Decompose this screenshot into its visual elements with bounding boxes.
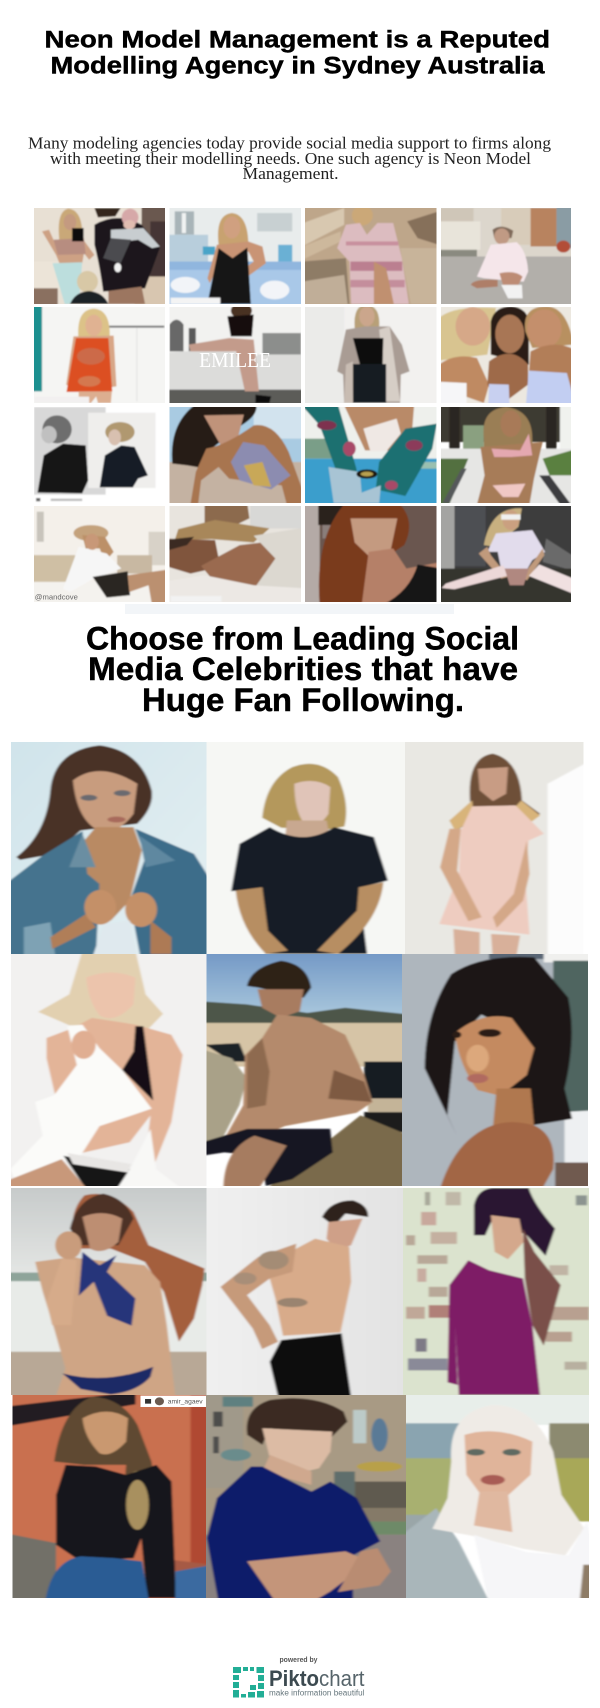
photo: navy polo man <box>206 1395 406 1598</box>
title: Neon Model Management is a Reputed <box>44 26 550 54</box>
photo: white tee sitting on road <box>441 506 571 602</box>
panel: top photo grid <box>23 198 581 614</box>
photo: EMILEE fashion ad <box>170 307 301 403</box>
photo: platinum blonde portrait <box>406 1395 589 1598</box>
icon: Piktochart mark <box>233 1667 264 1698</box>
photo: red-haired portrait <box>305 506 436 602</box>
photo: pink dress <box>405 742 584 954</box>
photo: dark bob portrait <box>402 954 588 1186</box>
title: Modelling Agency in Sydney Australia <box>50 52 545 80</box>
photo: black dress by blue counter <box>170 208 301 304</box>
footer: Piktochart logo <box>233 1655 365 1698</box>
photo: black sweater by orange wall <box>12 1395 206 1598</box>
photo: denim jacket model <box>11 742 206 954</box>
title <box>44 26 550 80</box>
photo: three models <box>441 307 571 403</box>
pale strip below grid <box>125 604 454 614</box>
section heading <box>86 620 519 718</box>
photo: crouching in pink sweater <box>441 208 571 304</box>
intro text block: Management. <box>242 164 338 183</box>
tag: amir_agaev: amir_agaev <box>168 1399 203 1406</box>
photo: striped robe on rocks <box>305 208 436 304</box>
photo: orange floral dress <box>34 307 165 403</box>
photo: mirror selfie family <box>34 208 165 304</box>
section heading: Huge Fan Following. <box>142 682 464 718</box>
photo: teal floral shirt and pool <box>305 407 436 503</box>
photo: EMILEE fashion ad: EMILEE <box>199 348 271 372</box>
wordmark: Piktochart <box>269 1666 364 1691</box>
photo: man in black tee <box>206 742 405 954</box>
photo: navy halter on beach <box>11 1188 206 1395</box>
photo: dark-haired model in halter <box>170 407 301 503</box>
intro text block: with meeting their modelling needs. One such agency is Neon Model <box>50 149 531 168</box>
photo: tan hat lounging: @mandcove <box>35 592 78 601</box>
photo: purple dress and hat <box>403 1188 589 1395</box>
tag: amir_agaev <box>140 1396 206 1407</box>
photo: tan hat lounging <box>34 506 165 602</box>
photo: shirtless man on rocks <box>206 954 402 1186</box>
photo: black-and-white collage <box>34 407 156 502</box>
photo: taupe coat <box>305 307 436 403</box>
photo: pink bikini <box>441 407 571 503</box>
photo: lying down portrait <box>170 506 301 602</box>
photo: blonde model with white sheet <box>11 954 206 1186</box>
intro text block <box>28 134 551 183</box>
section heading: Media Celebrities that have <box>88 651 518 687</box>
intro text block: Many modeling agencies today provide social media support to firms along <box>28 134 551 152</box>
tagline: make information beautiful <box>269 1688 365 1698</box>
section heading: Choose from Leading Social <box>86 620 519 656</box>
powered by label: powered by <box>280 1655 318 1664</box>
photo: tattooed man <box>206 1188 403 1395</box>
panel: celebrity photo grid <box>0 734 598 1605</box>
